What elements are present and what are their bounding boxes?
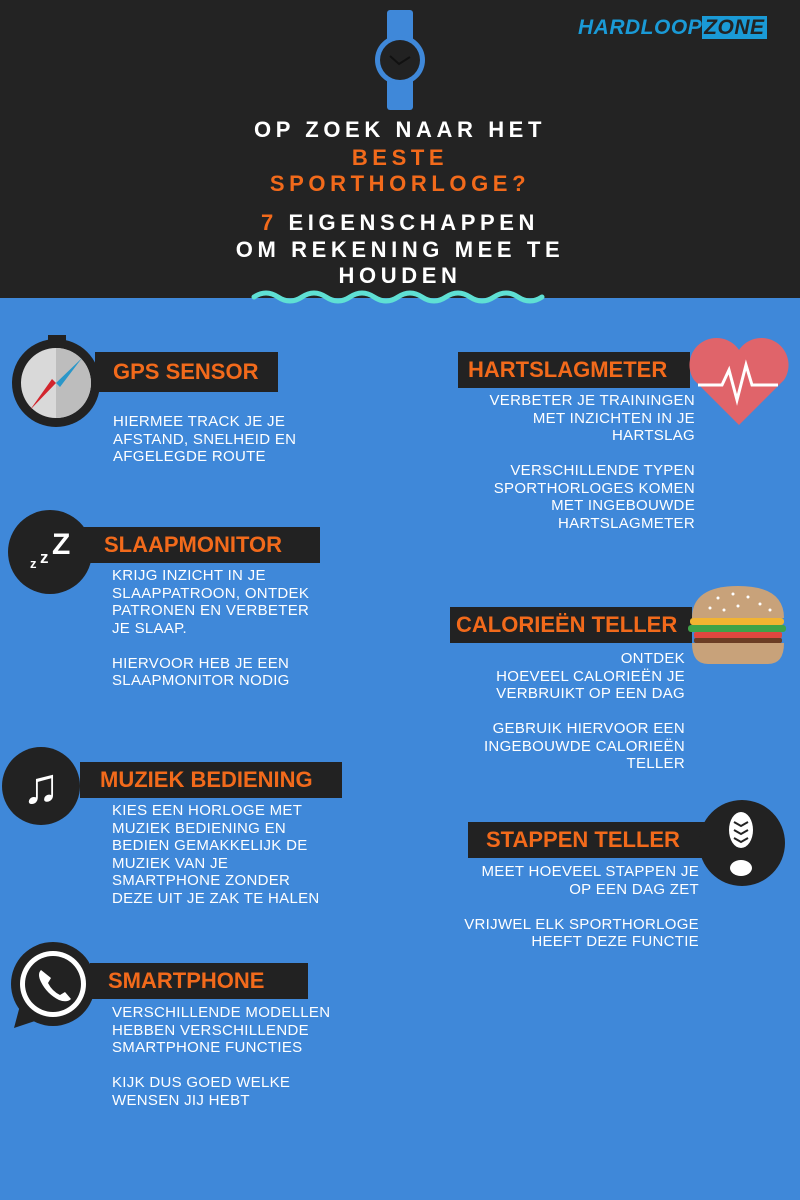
icon: footprint (702, 800, 785, 886)
text (112, 1004, 330, 1108)
panel: muziek bediening (2, 747, 342, 906)
text: VERSCHILLENDE MODELLEN (112, 1004, 330, 1021)
logo: HARDLOOPZONE (578, 16, 765, 39)
icon: burger (688, 586, 786, 664)
heading (450, 607, 692, 643)
heading (458, 352, 690, 388)
text: HOEVEEL CALORIEËN JE (496, 668, 685, 684)
text: MEET HOEVEEL STAPPEN JE (481, 863, 699, 880)
text: VERBRUIKT OP EEN DAG (496, 685, 685, 702)
icon: compass (12, 335, 99, 427)
icon: music note: ♫ (22, 758, 60, 814)
icon: sleep: Z (52, 528, 70, 561)
text (489, 392, 695, 532)
text: MUZIEK VAN JE (112, 854, 228, 872)
icon: watch (375, 10, 425, 110)
text (113, 413, 296, 465)
text (484, 650, 685, 772)
text (112, 802, 320, 906)
title: SPORTHORLOGE? (270, 171, 530, 196)
icon: sleep: z (30, 556, 36, 571)
title: BESTE (352, 145, 448, 170)
text: AFSTAND, SNELHEID EN (113, 430, 296, 448)
heading: GPS SENSOR (113, 359, 258, 384)
title: HOUDEN (339, 263, 461, 288)
text: TELLER (626, 755, 685, 772)
text: SMARTPHONE ZONDER (112, 872, 290, 889)
text: HEEFT DEZE FUNCTIE (531, 933, 699, 950)
text: ONTDEK (621, 650, 685, 667)
title: OM REKENING MEE TE (236, 237, 564, 262)
text: HIERMEE TRACK JE JE (113, 413, 285, 430)
text: GEBRUIK HIERVOOR EEN (493, 720, 685, 737)
icon: whatsapp phone (11, 942, 92, 1028)
panel: GPS sensor (12, 335, 296, 465)
heading (468, 822, 708, 858)
text (464, 863, 699, 950)
heading: SMARTPHONE (108, 968, 264, 993)
text: SPORTHORLOGES KOMEN (494, 480, 695, 496)
text: MET INGEBOUWDE (551, 497, 695, 514)
panel: stappen teller (464, 800, 785, 950)
title (236, 117, 564, 288)
wave (252, 290, 544, 304)
text: PATRONEN EN VERBETER (112, 602, 309, 619)
text: VERBETER JE TRAININGEN (489, 392, 695, 409)
text: OP EEN DAG ZET (569, 880, 699, 898)
text: HEBBEN VERSCHILLENDE (112, 1022, 309, 1038)
heading: HARTSLAGMETER (468, 357, 667, 382)
text: MET INZICHTEN IN JE (533, 410, 695, 426)
panel: calorieen teller (450, 586, 786, 772)
panel: smartphone (11, 942, 330, 1108)
text: HARTSLAG (612, 427, 695, 444)
text: KIES EEN HORLOGE MET (112, 802, 302, 819)
text: JE SLAAP. (112, 620, 187, 636)
heading: STAPPEN TELLER (486, 827, 680, 852)
text: SLAAPMONITOR NODIG (112, 672, 290, 689)
text: SLAAPPATROON, ONTDEK (112, 584, 309, 602)
text: INGEBOUWDE CALORIEËN (484, 738, 685, 754)
panel: slaapmonitor (8, 510, 320, 689)
text: VRIJWEL ELK SPORTHORLOGE (464, 916, 699, 932)
text: BEDIEN GEMAKKELIJK DE (112, 837, 308, 854)
title: OP ZOEK NAAR HET (254, 117, 546, 142)
heading (80, 762, 342, 798)
header (0, 0, 800, 298)
text (112, 567, 309, 689)
heading: MUZIEK BEDIENING (100, 767, 313, 792)
text: KRIJG INZICHT IN JE (112, 567, 266, 584)
heading (70, 527, 320, 563)
heading: CALORIEËN TELLER (456, 612, 677, 637)
heading (90, 963, 308, 999)
icon: heart (689, 338, 789, 425)
text: SMARTPHONE FUNCTIES (112, 1039, 302, 1056)
text: MUZIEK BEDIENING EN (112, 820, 286, 836)
text: HIERVOOR HEB JE EEN (112, 654, 289, 672)
heading: SLAAPMONITOR (104, 532, 282, 557)
icon: sleep: z (40, 548, 48, 567)
title: 7 EIGENSCHAPPEN (261, 210, 539, 235)
text: AFGELEGDE ROUTE (113, 448, 266, 465)
panel: hartslagmeter (458, 338, 789, 532)
text: DEZE UIT JE ZAK TE HALEN (112, 890, 320, 906)
text: HARTSLAGMETER (558, 514, 695, 532)
text: VERSCHILLENDE TYPEN (510, 462, 695, 479)
text: KIJK DUS GOED WELKE (112, 1074, 290, 1091)
text: WENSEN JIJ HEBT (112, 1092, 250, 1108)
icon: music note (2, 747, 80, 825)
heading (95, 352, 278, 392)
icon: sleep (8, 510, 92, 594)
